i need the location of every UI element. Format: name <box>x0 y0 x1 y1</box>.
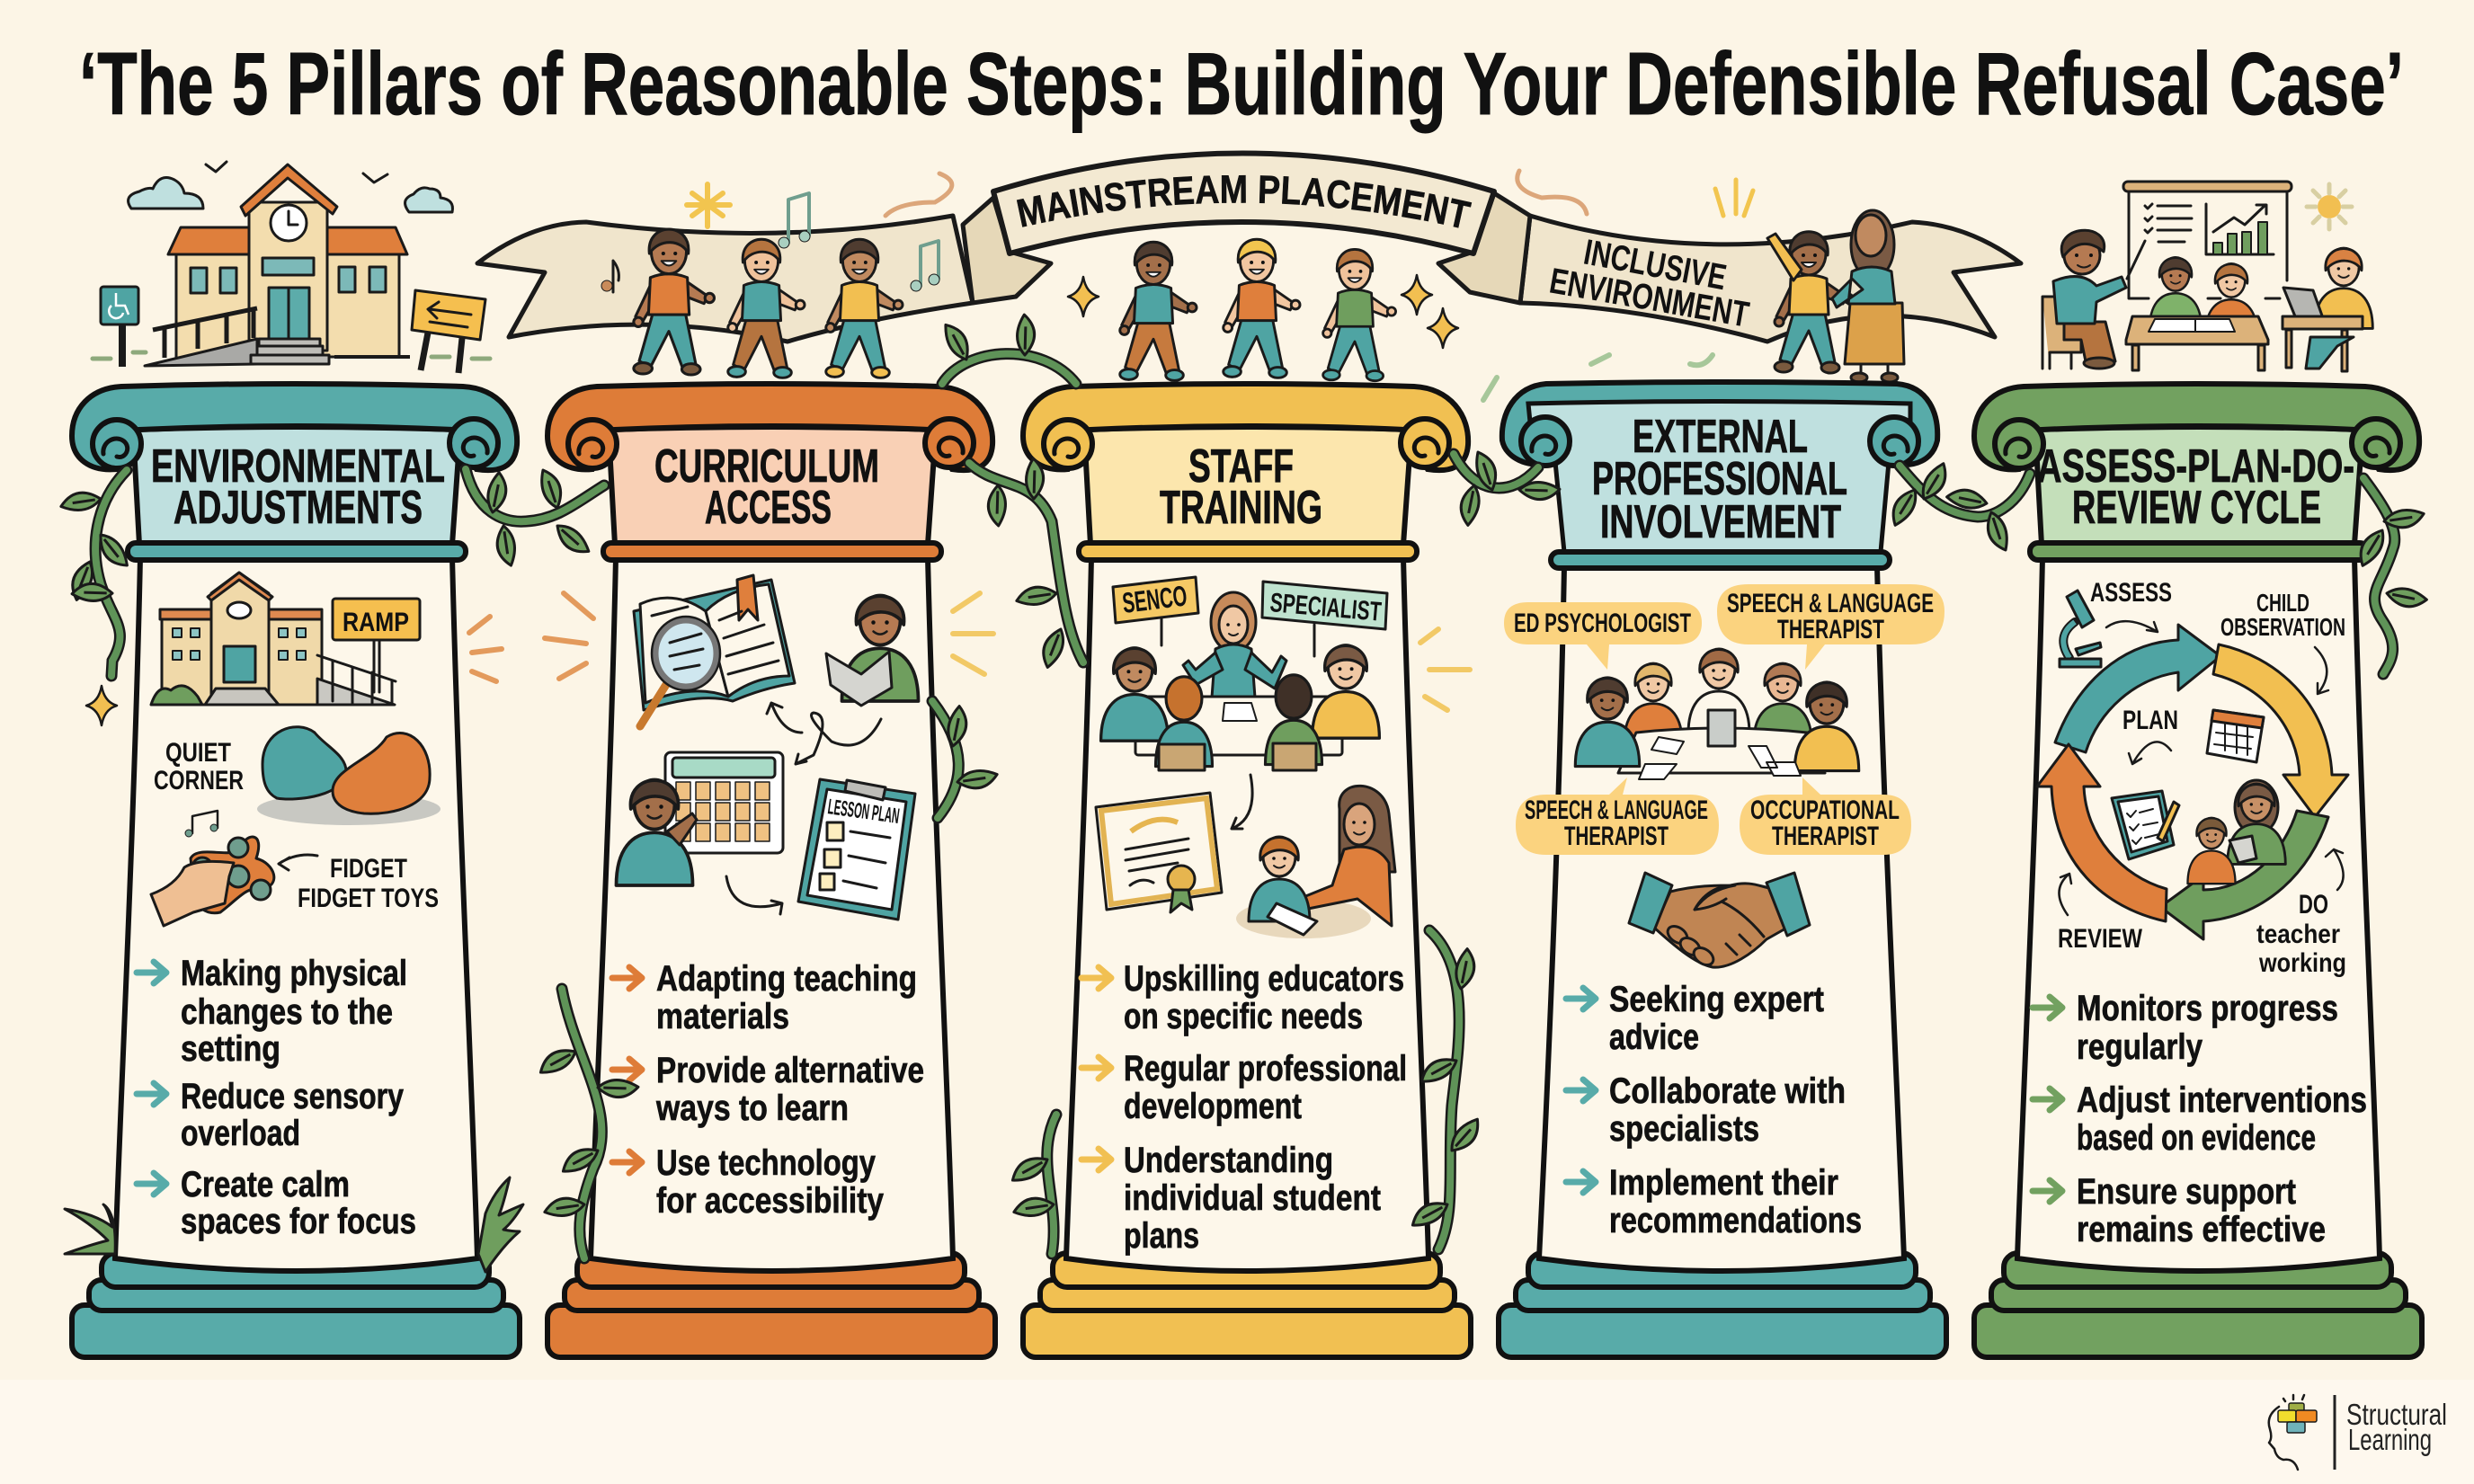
banner text: inclusive environment: ENVIRONMENT <box>1546 262 1752 335</box>
pillar 2 curved arrow <box>726 876 782 914</box>
pillar 1 bullets: spaces for focus <box>181 1202 416 1241</box>
senco sign <box>1113 577 1198 623</box>
fidget toys label <box>298 854 439 913</box>
calendar icon <box>2207 710 2264 762</box>
school illustration with ramp <box>93 162 490 373</box>
structural learning logo: Learning <box>2348 1423 2432 1456</box>
bubble: occupational therapist: THERAPIST <box>1772 822 1879 851</box>
quiet corner with beanbags: QUIET <box>165 738 231 768</box>
bubble: occupational therapist: OCCUPATIONAL <box>1750 795 1900 825</box>
pillar 1 bullets: overload <box>181 1114 300 1153</box>
pillar 1 school with ramp sign: RAMP <box>343 608 409 637</box>
pillar 1 bullets: Create calm <box>181 1165 350 1204</box>
pillar 2 bullets: Adapting teaching <box>656 959 917 999</box>
pillar 5 frame <box>1974 384 2422 1357</box>
cycle labels: ASSESS <box>2090 578 2172 608</box>
boy waving with teacher <box>1767 210 1904 382</box>
bubble: speech and language therapist top: THERAPIST <box>1777 615 1884 644</box>
cycle labels: REVIEW <box>2058 924 2143 954</box>
bubble: ed psychologist: ED PSYCHOLOGIST <box>1514 609 1691 638</box>
pillar 2 bullets: for accessibility <box>656 1181 885 1221</box>
cycle labels: teacher <box>2256 920 2340 949</box>
pillar 3 bullets: Upskilling educators <box>1124 959 1404 999</box>
climbing vines <box>61 315 2427 1258</box>
bubble: occupational therapist <box>1740 778 1911 855</box>
pillar 3 bullets: on specific needs <box>1124 997 1363 1036</box>
pillar 5 bullets: based on evidence <box>2077 1118 2316 1158</box>
wings <box>176 254 399 360</box>
certificate <box>1096 793 1222 912</box>
sparkle rays between pillars <box>469 593 1470 710</box>
structural learning logo <box>2269 1395 2447 1470</box>
pillar 5 bullets <box>2033 989 2367 1249</box>
pillar 5 bullets: regularly <box>2077 1027 2203 1067</box>
checklist clipboard icon <box>2112 791 2179 859</box>
pillar 5 heading <box>2037 440 2354 534</box>
picture grid with child <box>617 752 783 885</box>
cycle labels: CHILD <box>2256 589 2309 617</box>
grass tufts at pillar 1 base <box>65 1177 523 1272</box>
pillar 1 bullets: Reduce sensory <box>181 1077 405 1116</box>
pillar 4 heading: PROFESSIONAL <box>1592 453 1847 505</box>
decorative notes, stars and swirls <box>86 171 1753 725</box>
pillar 3 heading <box>1160 440 1322 534</box>
pillar 3 bullets: Regular professional <box>1124 1049 1407 1089</box>
pillar 5 heading: ASSESS-PLAN-DO- <box>2037 440 2354 493</box>
pillar 4 frame <box>1499 382 1946 1357</box>
pillar 3 heading: STAFF <box>1188 440 1294 493</box>
pillar 1 heading: ADJUSTMENTS <box>174 482 423 534</box>
teacher seated with pointer <box>2042 230 2145 369</box>
pillar 1 bullets: setting <box>181 1029 280 1069</box>
banner: mainstream placement ribbon <box>475 151 2023 343</box>
right ribbon tail <box>1520 216 2021 342</box>
whiteboard <box>2123 182 2292 298</box>
banner text: inclusive environment <box>1546 233 1752 335</box>
birds <box>206 162 387 182</box>
pillar 4 heading: INVOLVEMENT <box>1600 496 1841 548</box>
sun <box>2307 184 2352 229</box>
pillar 5 bullets: Adjust interventions <box>2077 1080 2367 1120</box>
bubble: speech and language therapist bottom: THERAPIST <box>1564 822 1669 851</box>
pillar 4 bullets <box>1566 980 1862 1240</box>
teacher working with child <box>2187 780 2285 884</box>
pillar 3 bullets: individual student <box>1124 1178 1381 1218</box>
pillar 5: assess plan do review cycle <box>1974 384 2422 1357</box>
pillar 5 heading: REVIEW CYCLE <box>2072 482 2321 534</box>
pillar 3: staff training <box>1023 384 1471 1357</box>
pillar 3 bullets: development <box>1124 1087 1302 1126</box>
pillar 4 bullets: Seeking expert <box>1609 980 1824 1019</box>
teacher helping child <box>1236 786 1395 938</box>
left ribbon tail <box>477 216 973 342</box>
fidget toy <box>151 811 317 926</box>
pillar 3 bullets <box>1081 959 1407 1256</box>
pillar 3 bullets: Understanding <box>1124 1141 1333 1180</box>
pillar 3 frame <box>1023 384 1471 1357</box>
quiet corner with beanbags <box>154 727 441 825</box>
pillar 2 bullets: materials <box>656 997 789 1036</box>
bubble: speech and language therapist top: SPEECH & LANGUAGE <box>1727 589 1934 618</box>
pillar 2 heading: ACCESS <box>705 482 832 534</box>
open book with magnifier <box>634 575 795 726</box>
pillar 5 bullets: remains effective <box>2077 1210 2326 1249</box>
pillar 1 heading <box>151 440 445 534</box>
pillar 2 bullets: Provide alternative <box>656 1051 924 1090</box>
pillar 1 school with ramp sign <box>151 573 420 705</box>
bubble: speech and language therapist top <box>1717 584 1944 670</box>
direction sign <box>421 333 462 373</box>
banner text: mainstream placement: MAINSTREAM PLACEMENT <box>1016 174 1473 228</box>
ribbon folds <box>963 198 1051 303</box>
pillar 5 bullets: Ensure support <box>2077 1172 2296 1212</box>
bubble: speech and language therapist bottom <box>1516 778 1719 855</box>
pillar 2 connector arrows <box>767 703 881 764</box>
pillar 5 bullets: Monitors progress <box>2077 989 2338 1028</box>
fidget toys label: FIDGET TOYS <box>298 884 439 913</box>
cycle arrow: orange review <box>2037 744 2167 921</box>
pillar 2 frame <box>547 384 995 1357</box>
cloud left <box>129 178 203 209</box>
specialist sign: SPECIALIST <box>1268 588 1383 627</box>
handshake icon <box>1629 873 1810 968</box>
pillar 1 bullets: changes to the <box>181 992 393 1032</box>
children dancing under banner <box>634 210 1904 382</box>
pillar 2 heading: CURRICULUM <box>654 440 879 493</box>
pillar 4 bullets: Implement their <box>1609 1163 1838 1203</box>
specialist sign <box>1262 582 1387 629</box>
pillar 1 bullets: Making physical <box>181 954 407 993</box>
bubble: speech and language therapist bottom: SPEECH & LANGUAGE <box>1525 795 1708 825</box>
cycle arrow: yellow plan <box>2213 644 2348 817</box>
pillar 1: environmental adjustments <box>72 384 520 1357</box>
quiet corner with beanbags: CORNER <box>154 766 244 795</box>
pillar 1 heading: ENVIRONMENTAL <box>151 440 445 493</box>
pillar 3 bullets: plans <box>1124 1216 1199 1256</box>
cycle arrow: green do <box>2160 811 2328 939</box>
cycle diagram <box>2037 578 2348 978</box>
pillar 4 heading: EXTERNAL <box>1633 411 1808 463</box>
lesson plan clipboard: LESSON PLAN <box>826 795 901 829</box>
bubble: ed psychologist <box>1504 602 1702 670</box>
pillar 2 heading <box>654 440 879 534</box>
professionals around table <box>1575 649 1859 779</box>
students at table <box>2126 257 2268 370</box>
senco sign: SENCO <box>1120 579 1188 619</box>
pillar 4 bullets: Collaborate with <box>1609 1071 1846 1111</box>
cycle arrow: teal assess <box>2055 625 2220 752</box>
child reading <box>826 595 919 706</box>
cycle labels <box>2058 578 2346 978</box>
pillar 4 bullets: recommendations <box>1609 1201 1862 1240</box>
standing teacher <box>1183 592 1286 698</box>
pillar 1 frame <box>72 384 520 1357</box>
pillar 2 bullets: ways to learn <box>655 1089 849 1128</box>
cycle labels: OBSERVATION <box>2220 613 2345 641</box>
pillar 2 bullets <box>612 959 924 1221</box>
accessibility sign <box>119 324 126 367</box>
SENCO and specialist meeting <box>1101 577 1387 770</box>
classroom illustration top right <box>2042 182 2372 371</box>
pillar 4 bullets: specialists <box>1609 1109 1759 1149</box>
ramp <box>145 339 257 366</box>
small pointer arrows <box>2059 621 2344 915</box>
cycle labels: working <box>2258 948 2346 978</box>
pillar 4: external professional involvement <box>1499 382 1946 1357</box>
cloud right <box>405 188 452 212</box>
student with laptop <box>2283 248 2372 371</box>
pillar 2: curriculum access <box>547 384 995 1357</box>
pillar 3 heading: TRAINING <box>1160 482 1322 534</box>
pillar 1 bullets <box>137 954 416 1241</box>
pillar 2 bullets: Use technology <box>656 1143 877 1183</box>
pillar 4 bullets: advice <box>1609 1017 1699 1057</box>
fidget toys label: FIDGET <box>330 854 407 884</box>
central ribbon <box>993 153 1494 253</box>
lesson plan clipboard <box>798 779 915 920</box>
structural learning logo: Structural <box>2346 1398 2447 1431</box>
cycle labels: DO <box>2299 890 2328 920</box>
banner text: inclusive environment: INCLUSIVE <box>1580 233 1730 298</box>
cycle labels: PLAN <box>2122 706 2178 735</box>
pillar 3 arrow down <box>1232 775 1252 829</box>
microscope icon <box>2060 591 2101 667</box>
pillar 4 heading <box>1592 411 1847 548</box>
